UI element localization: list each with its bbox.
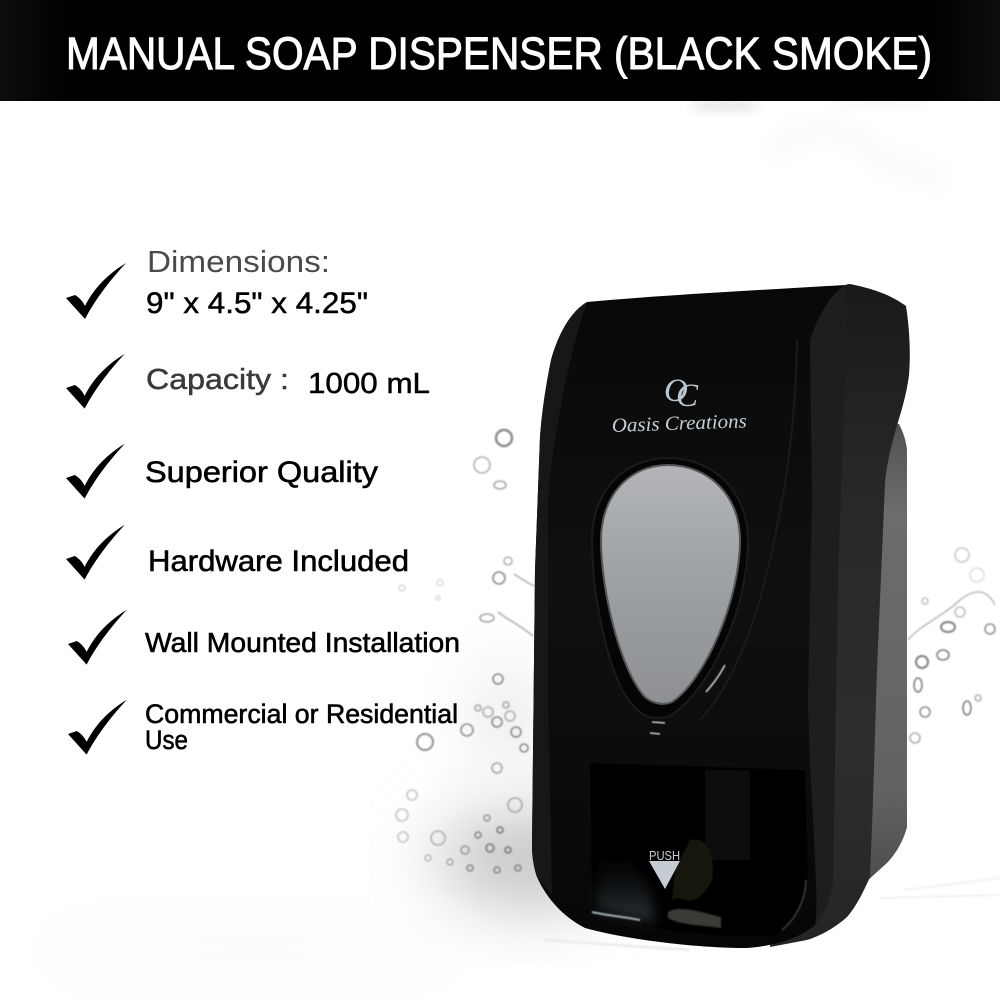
item: commercial or residential use: Use	[145, 725, 188, 755]
dispenser: right edge band	[808, 285, 847, 925]
dispenser: lower left reflection	[595, 850, 655, 922]
logo: monogram: O	[664, 373, 688, 409]
item: hardware included: Hardware Included	[148, 545, 409, 578]
item: capacity: 1000 mL	[308, 368, 430, 400]
dispenser: corner highlight	[782, 880, 806, 930]
push arrow	[649, 861, 680, 889]
dispenser: side housing	[770, 284, 910, 947]
item: superior quality	[66, 444, 378, 499]
dispenser: rim highlight	[650, 665, 725, 734]
dispenser: bottom highlight	[592, 912, 640, 920]
dispenser: upper panel curve	[700, 340, 797, 720]
item: hardware included	[66, 525, 409, 580]
dispenser: pump neck	[705, 770, 750, 860]
dispenser: wall back plate	[860, 420, 907, 882]
item: wall mounted installation	[68, 610, 460, 665]
dispenser: window surround	[592, 458, 748, 718]
soap dispenser	[532, 284, 910, 948]
item: commercial or residential use	[68, 699, 458, 755]
item: capacity: Capacity :	[146, 364, 289, 396]
item: dimensions: Dimensions:	[147, 244, 330, 279]
water splash right of dispenser	[908, 548, 995, 743]
item: superior quality: Superior Quality	[145, 456, 378, 489]
feature list	[66, 244, 460, 755]
item: wall mounted installation: Wall Mounted Installation	[145, 627, 460, 658]
push label: PUSH	[649, 849, 680, 863]
item: dimensions: 9" x 4.5" x 4.25"	[146, 287, 368, 320]
dispenser: front cover	[532, 285, 847, 948]
dispenser: left edge band	[532, 302, 587, 895]
water splash left of dispenser	[396, 430, 534, 873]
item: dimensions	[66, 244, 368, 320]
dispenser: window	[601, 465, 740, 704]
logo: monogram: C	[676, 378, 699, 414]
logo: brand name: Oasis Creations	[611, 410, 747, 437]
dispenser: nozzle reflection	[668, 909, 721, 928]
title band	[0, 0, 1000, 101]
dispenser: lower pump chamber	[590, 763, 808, 936]
title: MANUAL SOAP DISPENSER (BLACK SMOKE)	[66, 28, 932, 79]
logo: monogram	[664, 373, 699, 414]
dispenser: pump mechanism	[672, 839, 713, 900]
item: commercial or residential use: Commercial or Residential	[145, 699, 458, 729]
item: capacity	[66, 354, 430, 409]
